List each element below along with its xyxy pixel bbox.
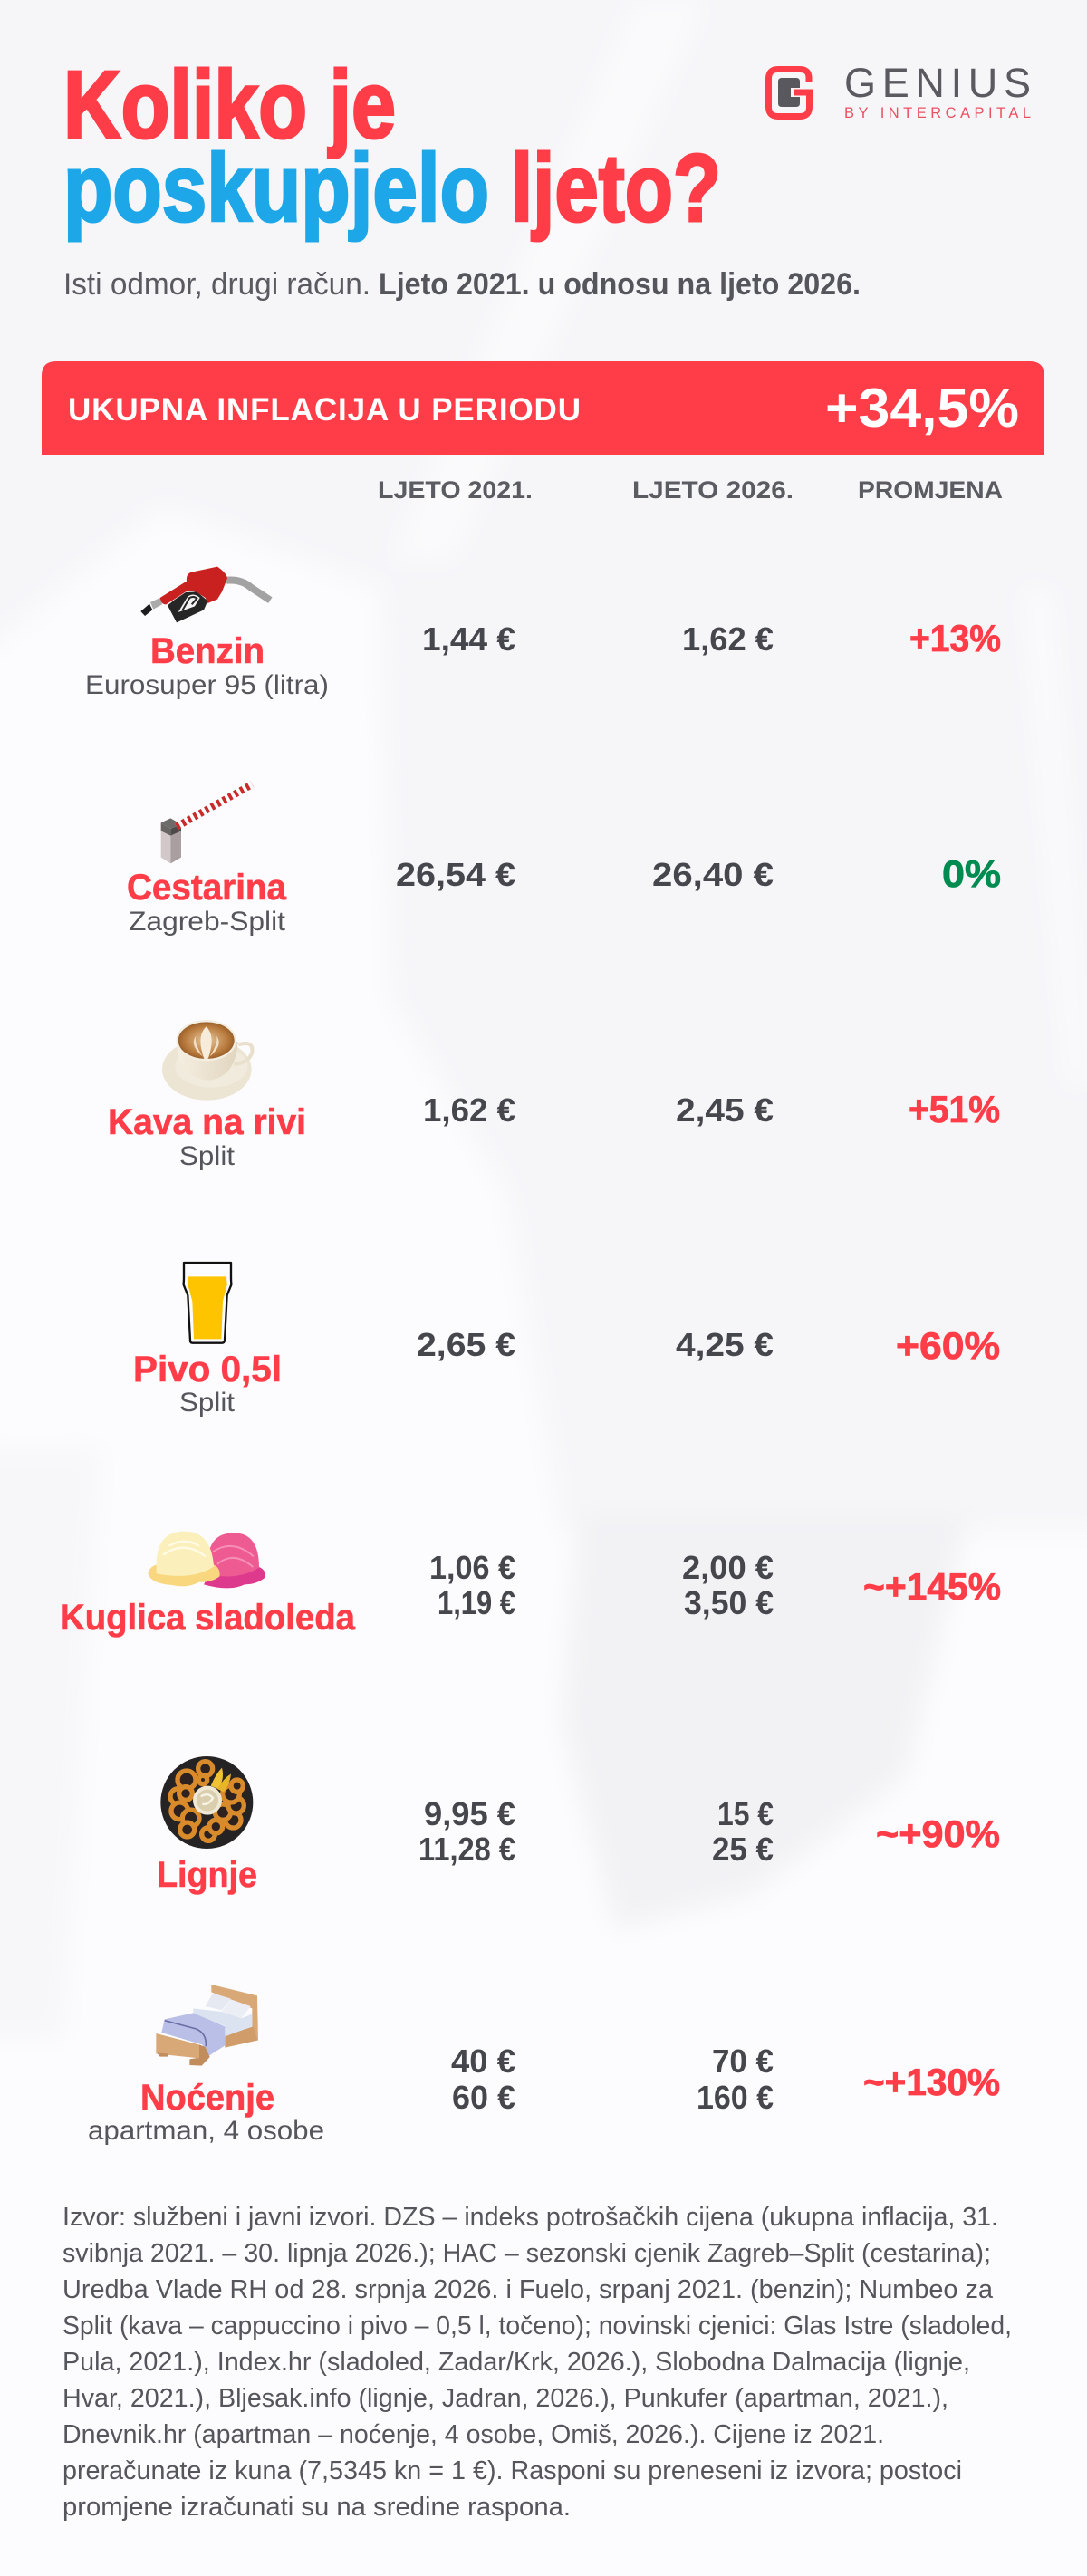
prices 2026: 160 € <box>697 2079 774 2116</box>
title: Koliko je <box>63 52 396 159</box>
title <box>63 52 721 242</box>
row: nocenje <box>88 1985 1000 2146</box>
logo wordmark: GENIUS <box>844 60 1031 106</box>
icon: fuel nozzle <box>140 567 270 622</box>
price 2021: 2,65 € <box>417 1326 515 1363</box>
label: Benzin: Benzin <box>150 631 265 671</box>
icon: ice cream scoops <box>148 1532 265 1588</box>
prices 2021: 11,28 € <box>418 1831 515 1868</box>
title: ljeto? <box>511 135 721 242</box>
price 2021: 1,62 € <box>423 1091 515 1129</box>
row: sladoled <box>60 1532 1001 1638</box>
prices 2021 <box>418 1795 515 1868</box>
source note: Hvar, 2021.), Bljesak.info (lignje, Jadran, 2026.), Punkufer (apartman, 2021.), <box>63 2384 948 2413</box>
sublabel: Split: Split <box>179 1388 236 1418</box>
label: Lignje: Lignje <box>157 1855 257 1895</box>
subtitle: Ljeto 2021. u odnosu na ljeto 2026. <box>379 267 861 302</box>
change: +13% <box>909 617 1001 659</box>
table header: LJETO 2026. <box>632 476 794 504</box>
sublabel: Zagreb-Split: Zagreb-Split <box>129 907 286 937</box>
prices 2026: 15 € <box>717 1795 774 1832</box>
prices 2021: 40 € <box>451 2043 515 2080</box>
prices 2021: 60 € <box>452 2079 515 2116</box>
row: kava <box>108 1020 1000 1171</box>
icon: coffee cup <box>162 1020 252 1101</box>
row: benzin <box>85 567 1001 700</box>
label: Noćenje: Noćenje <box>140 2078 274 2118</box>
source note: svibnja 2021. – 30. lipnja 2026.); HAC – sezonski cjenik Zagreb–Split (cestarina); <box>63 2239 991 2268</box>
label: Kuglica sladoleda: Kuglica sladoleda <box>60 1598 356 1638</box>
banner: total inflation: +34,5% <box>825 378 1019 438</box>
icon: toll barrier <box>161 784 252 863</box>
prices 2026: 70 € <box>712 2043 774 2080</box>
change: +60% <box>896 1324 1000 1367</box>
change: ~+145% <box>863 1565 1001 1608</box>
source note: Dnevnik.hr (apartman – noćenje, 4 osobe, Omiš, 2026.). Cijene iz 2021. <box>63 2420 884 2449</box>
logo icon <box>768 69 810 116</box>
price 2026: 26,40 € <box>652 856 774 893</box>
label: Cestarina: Cestarina <box>127 868 287 908</box>
table header: PROMJENA <box>858 476 1003 504</box>
logo tagline: BY INTERCAPITAL <box>844 105 1031 121</box>
source note: preračunate iz kuna (7,5345 kn = 1 €). Rasponi su preneseni iz izvora; postoci <box>63 2456 962 2485</box>
sublabel: Eurosuper 95: Eurosuper 95 (litra) <box>85 670 329 700</box>
sublabel: apartman: apartman, 4 osobe <box>88 2116 324 2146</box>
source note <box>63 2203 1012 2522</box>
subtitle: Isti odmor, drugi račun. <box>63 267 370 302</box>
label: Kava na rivi: Kava na rivi <box>108 1102 306 1142</box>
prices 2026 <box>712 1795 774 1868</box>
prices 2026: 2,00 € <box>682 1549 774 1586</box>
source note: promjene izračunati su na sredine raspona. <box>63 2493 571 2522</box>
prices 2026 <box>697 2043 774 2116</box>
price 2021: 1,44 € <box>422 620 515 658</box>
label: Pivo 0,5l: Pivo 0,5l <box>133 1350 282 1389</box>
logo: Genius by Intercapital <box>768 60 1031 121</box>
prices 2021 <box>451 2043 515 2116</box>
table header <box>378 476 1003 504</box>
price 2026: 1,62 € <box>682 620 774 658</box>
prices 2021: 1,06 € <box>429 1549 515 1586</box>
row: lignje <box>157 1756 1000 1895</box>
table header: LJETO 2021. <box>378 476 533 504</box>
prices 2026: 3,50 € <box>684 1584 774 1621</box>
title: poskupjelo <box>63 135 489 242</box>
prices 2021: 1,19 € <box>438 1584 515 1621</box>
icon: beer glass <box>184 1263 231 1343</box>
source note: Izvor: službeni i javni izvori. DZS – indeks potrošačkih cijena (ukupna inflacija, 31. <box>63 2203 998 2232</box>
source note: Pula, 2021.), Index.hr (sladoled, Zadar/Krk, 2026.), Slobodna Dalmacija (lignje, <box>63 2348 970 2377</box>
source note: Uredba Vlade RH od 28. srpnja 2026. i Fuelo, srpanj 2021. (benzin); Numbeo za <box>63 2275 993 2304</box>
price 2026: 4,25 € <box>676 1326 774 1363</box>
prices 2021 <box>429 1549 515 1621</box>
row: cestarina <box>127 784 1001 937</box>
source note: Split (kava – cappuccino i pivo – 0,5 l, točeno); novinski cjenici: Glas Istre (sladoled, <box>63 2312 1012 2341</box>
prices 2026 <box>682 1549 774 1621</box>
subtitle <box>63 267 861 302</box>
sublabel: Split: Split <box>179 1141 236 1171</box>
change: ~+130% <box>863 2061 1000 2103</box>
price 2021: 26,54 € <box>396 856 515 893</box>
banner: total inflation: UKUPNA INFLACIJA U PERIODU <box>68 392 581 428</box>
prices 2021: 9,95 € <box>424 1795 515 1832</box>
price 2026: 2,45 € <box>676 1091 774 1129</box>
row: pivo <box>133 1263 1000 1418</box>
icon: calamari plate <box>160 1756 253 1849</box>
change: +51% <box>909 1088 1000 1130</box>
icon: bed <box>156 1985 258 2066</box>
change: 0% <box>942 852 1001 895</box>
banner: total inflation <box>42 361 1044 455</box>
prices 2026: 25 € <box>712 1831 774 1868</box>
change: ~+90% <box>876 1812 1000 1855</box>
